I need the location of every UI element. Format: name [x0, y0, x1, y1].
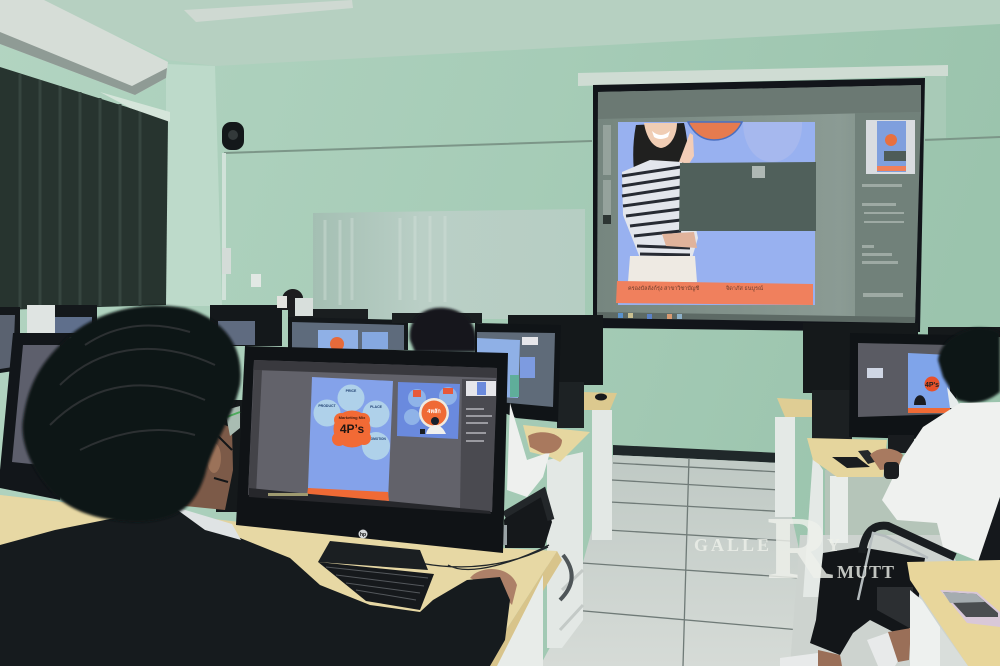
- floor right of desks: [790, 535, 1000, 666]
- hp logo: [358, 530, 368, 538]
- left keyboard: [0, 515, 60, 546]
- strip text: ครองบัลลังก์รุ่ง สาขาวิชาบัญชี: [628, 285, 699, 292]
- baseboard: [613, 445, 780, 463]
- poster on projection: [618, 122, 815, 305]
- watermark GALLE: GALLE: [694, 535, 772, 555]
- second artboard: 4หลัก: [427, 408, 441, 415]
- taskbar: [597, 312, 915, 323]
- left tool bar: [248, 370, 262, 495]
- right sock: [867, 632, 900, 666]
- mouse: [858, 450, 878, 464]
- promotion circle: [362, 432, 390, 460]
- speech circle: [743, 122, 802, 162]
- middle desk top: [523, 425, 590, 462]
- hand: [870, 449, 903, 470]
- centre right artboard: [520, 357, 535, 378]
- pillar: [166, 64, 222, 306]
- trousers: [810, 547, 925, 655]
- front student: [0, 306, 517, 666]
- chair seat: [877, 587, 913, 630]
- hair: [22, 306, 241, 522]
- speaker: [222, 122, 244, 150]
- monitor screen: [248, 360, 497, 512]
- empty artboard: [679, 162, 816, 231]
- centre screen: [292, 322, 404, 350]
- chair back: [812, 390, 852, 440]
- air conditioner: [0, 0, 170, 122]
- casing bracket: [925, 76, 946, 138]
- properties panel controls: [862, 184, 904, 297]
- shirt collar: [172, 506, 241, 540]
- watermark: [694, 499, 895, 598]
- product circle: PRODUCT: [318, 404, 337, 408]
- left 2 screen: [55, 317, 92, 333]
- desk leg side: [940, 627, 968, 666]
- right front desk: [907, 560, 1000, 666]
- glasses arm: [224, 412, 240, 418]
- monitor back: [508, 315, 603, 385]
- centre right green panel: [510, 375, 519, 397]
- strip of monitor behind head: [216, 400, 244, 512]
- monitor far left: [0, 307, 20, 373]
- wall sockets: [222, 248, 261, 287]
- hp logo: hp: [360, 532, 366, 538]
- chair arm: [862, 526, 955, 557]
- right panels: [460, 379, 497, 512]
- background student: [277, 289, 313, 316]
- far right monitor back: [928, 327, 1000, 337]
- ceiling: [40, 0, 1000, 66]
- desk two top: [807, 438, 887, 477]
- left ankle: [818, 650, 842, 666]
- orange strip: [616, 281, 813, 305]
- desk two leg right: [830, 476, 848, 543]
- monitor rear: [288, 309, 368, 319]
- tool swatch: [603, 215, 611, 224]
- projection screen: [593, 78, 925, 332]
- phone: [940, 590, 1000, 627]
- floor: [540, 455, 825, 666]
- dark chair back: [978, 497, 1000, 563]
- whiteboard: [313, 209, 585, 319]
- place circle: PLACE: [370, 405, 383, 409]
- main keyboard: [318, 562, 434, 610]
- watermark big R: R: [767, 499, 833, 598]
- dark storage: [557, 382, 584, 428]
- centre right poster: [477, 338, 520, 398]
- price circle: [338, 384, 364, 412]
- paper holder: [27, 305, 55, 333]
- woman figure: [622, 123, 698, 282]
- chair arm metal: [858, 533, 928, 600]
- place circle: [362, 400, 390, 428]
- right monitor: 4P's: [925, 382, 939, 389]
- right panel: [855, 112, 921, 323]
- right ankle: [888, 628, 911, 662]
- ceiling light: [184, 0, 353, 22]
- strip names: จิดาภัส ธนบูรณ์: [725, 285, 763, 292]
- desk one: [777, 398, 813, 417]
- front desk: [0, 495, 557, 666]
- window blinds: [0, 67, 168, 310]
- centre student chair: [504, 492, 552, 548]
- ear: [207, 443, 221, 473]
- back desk: [583, 392, 617, 410]
- hair highlights: [50, 326, 215, 450]
- price circle: PRICE: [346, 389, 357, 393]
- mask: [947, 387, 962, 410]
- under-desk wall: [825, 470, 945, 540]
- photoshop menu bar: [598, 85, 921, 119]
- face: [175, 420, 233, 510]
- desk leg: [910, 590, 940, 666]
- projector screen casing: [578, 65, 948, 86]
- promotion circle: PROMOTION: [366, 437, 387, 441]
- desk one leg: [775, 417, 795, 517]
- mask strap: [214, 436, 232, 482]
- front desk leg: [497, 575, 543, 666]
- poster: [308, 377, 393, 501]
- rear monitor: [392, 313, 482, 323]
- watermark Y: Y: [827, 535, 840, 555]
- back desk mouse: [595, 394, 607, 400]
- watch: [884, 462, 899, 479]
- jacket: [0, 507, 510, 666]
- monitor left 2: [55, 305, 97, 337]
- far left screen: [0, 315, 15, 369]
- monitor centre right: [475, 323, 561, 422]
- desk two leg left: [803, 455, 823, 597]
- back row, right of centre: [392, 308, 617, 540]
- back row monitors, left: [0, 289, 408, 373]
- centre right thumbnail: [522, 337, 538, 345]
- orange badge: [688, 122, 742, 140]
- tool bar: [603, 125, 611, 215]
- glasses: [225, 406, 240, 436]
- phone on desk: [832, 457, 870, 468]
- right desks: [775, 390, 1000, 666]
- left sock: [780, 653, 818, 666]
- hand: [470, 569, 517, 605]
- centre right screen: [477, 332, 555, 407]
- orange 4Ps blob: Marketing Mix: [339, 415, 366, 420]
- shirt: [882, 402, 1000, 562]
- student hair: [410, 308, 477, 352]
- monitor centre: [288, 317, 408, 350]
- centre artboard: [362, 332, 388, 349]
- centre poster: [318, 330, 358, 350]
- front desk edge: [483, 551, 562, 666]
- orange 4Ps blob: 4P’s: [340, 422, 364, 436]
- far left monitor: [0, 333, 70, 500]
- product circle: [314, 400, 340, 426]
- watermark MUTT: MUTT: [837, 562, 895, 582]
- second artboard: [397, 382, 460, 439]
- right monitor back: [803, 323, 918, 393]
- centre orange: [330, 337, 344, 351]
- right student: [780, 328, 1000, 666]
- centre student shirt: [507, 403, 562, 497]
- navigator panel: [866, 120, 915, 174]
- hair: [938, 328, 1000, 403]
- monitor centre-left: [210, 305, 282, 346]
- back desk leg: [592, 410, 612, 540]
- placeholder icon: [752, 166, 765, 178]
- cables: [385, 545, 549, 569]
- main monitor stand: [318, 541, 428, 570]
- wall rail: [224, 137, 1000, 153]
- right monitor: [849, 333, 958, 453]
- menu bar: [254, 360, 497, 378]
- centre-left screen: [218, 321, 255, 345]
- main monitor: [236, 346, 508, 553]
- orange footer strip: [307, 488, 389, 501]
- middle desk storage: [547, 452, 583, 648]
- taskbar: [249, 488, 491, 514]
- orange 4Ps blob: [332, 410, 371, 448]
- left desk: [0, 495, 240, 560]
